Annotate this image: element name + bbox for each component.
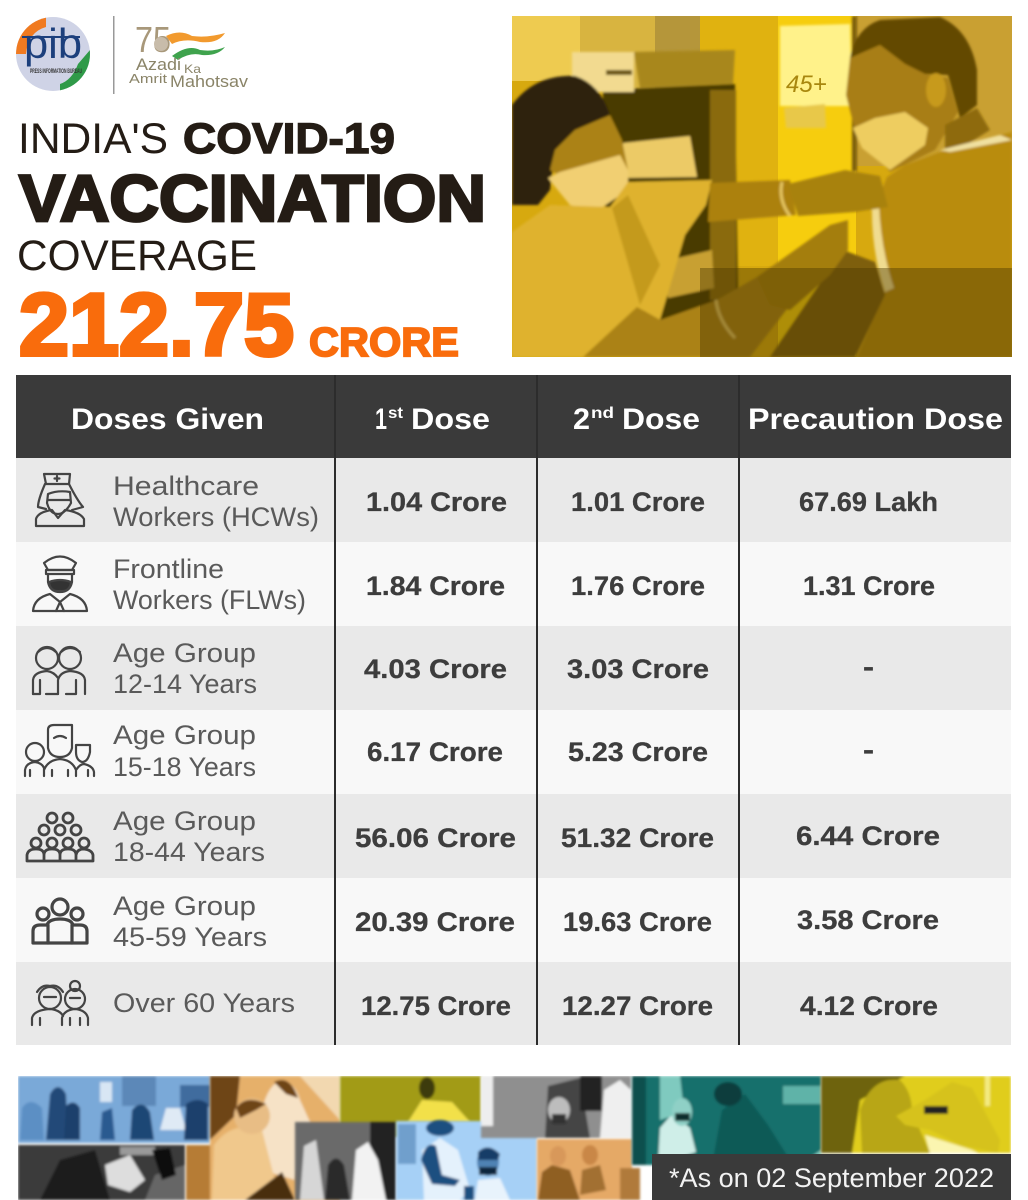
total doses figure: CRORE bbox=[309, 319, 459, 365]
photo: vaccination in progress bbox=[512, 16, 1012, 357]
logo: Azadi Ka Amrit Mahotsav: Azadi bbox=[136, 55, 181, 74]
table header: nd bbox=[591, 405, 614, 422]
collage: dark tile bbox=[18, 1145, 185, 1200]
row: healthcare workers bbox=[36, 471, 938, 532]
row: over 60: 12.75 Crore bbox=[361, 991, 511, 1021]
row: frontline workers: Workers (FLWs) bbox=[113, 585, 306, 615]
row: frontline workers: 1.76 Crore bbox=[571, 571, 705, 601]
logo: PIB bbox=[16, 17, 90, 91]
row: age 15-18: 15-18 Years bbox=[113, 752, 256, 782]
table header: 1 bbox=[375, 403, 387, 436]
collage: orange tile bbox=[186, 1076, 340, 1200]
row: age 15-18 bbox=[25, 720, 874, 782]
table header: Dose bbox=[411, 403, 490, 436]
row: age 18-44: Age Group bbox=[113, 806, 256, 836]
row: age 45-59: Age Group bbox=[113, 891, 256, 921]
row: age 12-14: 3.03 Crore bbox=[567, 654, 709, 684]
table header bbox=[16, 375, 1011, 458]
table header: Doses Given bbox=[71, 403, 264, 436]
row: frontline workers bbox=[33, 554, 935, 615]
photo: vaccination in progress: 45+ bbox=[786, 71, 827, 98]
row: age 18-44: 51.32 Crore bbox=[561, 823, 714, 853]
table header: Dose bbox=[622, 403, 700, 436]
row: age 12-14: 4.03 Crore bbox=[364, 654, 507, 684]
logo: Azadi Ka Amrit Mahotsav: Ka bbox=[184, 62, 201, 76]
row: age 15-18: - bbox=[863, 735, 874, 765]
icon: family bbox=[25, 725, 94, 776]
row: frontline workers: 1.31 Crore bbox=[803, 571, 935, 601]
logo: Azadi Ka Amrit Mahotsav bbox=[129, 19, 249, 91]
title: INDIA'S bbox=[18, 115, 168, 163]
title bbox=[17, 115, 486, 280]
logo: Azadi Ka Amrit Mahotsav: Mahotsav bbox=[170, 72, 249, 91]
collage: grey upper tile bbox=[481, 1076, 631, 1138]
row: age 18-44: 56.06 Crore bbox=[355, 823, 516, 853]
total doses figure bbox=[19, 275, 459, 374]
row: over 60: Over 60 Years bbox=[113, 988, 295, 1018]
row: age 12-14: 12-14 Years bbox=[113, 669, 257, 699]
collage: yellow tile bbox=[821, 1076, 1011, 1153]
row: age 45-59: 45-59 Years bbox=[113, 922, 267, 952]
table header: Precaution Dose bbox=[748, 403, 1003, 436]
row: age 15-18: 5.23 Crore bbox=[568, 737, 708, 767]
row: age 45-59 bbox=[33, 891, 939, 952]
row: healthcare workers: Healthcare bbox=[113, 471, 259, 501]
table header: 2 bbox=[573, 403, 590, 436]
row: healthcare workers: 1.04 Crore bbox=[366, 487, 507, 517]
table bbox=[16, 375, 1011, 1045]
collage: orange lower tile bbox=[537, 1139, 640, 1200]
logo: Azadi Ka Amrit Mahotsav: Amrit bbox=[129, 71, 167, 86]
row: over 60: 12.27 Crore bbox=[562, 991, 713, 1021]
row: age 12-14: Age Group bbox=[113, 638, 256, 668]
row: age 18-44: 6.44 Crore bbox=[796, 821, 940, 851]
date note bbox=[652, 1154, 1011, 1200]
row: age 45-59: 20.39 Crore bbox=[355, 907, 515, 937]
collage: light blue tile bbox=[396, 1120, 537, 1200]
title: VACCINATION bbox=[19, 161, 486, 235]
row: age 18-44: 18-44 Years bbox=[113, 837, 265, 867]
icon: three people bbox=[33, 899, 87, 943]
total doses figure: 212.75 bbox=[19, 275, 294, 374]
row: healthcare workers: 67.69 Lakh bbox=[799, 487, 938, 517]
icon: elderly couple bbox=[32, 981, 88, 1025]
collage: grey lower tile bbox=[295, 1122, 396, 1200]
row: over 60: 4.12 Crore bbox=[800, 991, 938, 1021]
collage: blue tile bbox=[18, 1076, 210, 1143]
row: over 60 bbox=[32, 981, 938, 1025]
row: frontline workers: Frontline bbox=[113, 554, 224, 584]
logo: Azadi Ka Amrit Mahotsav: 75 bbox=[135, 19, 171, 60]
logo: PIB: PRESS INFORMATION BUREAU bbox=[30, 69, 82, 75]
row: age 18-44 bbox=[27, 806, 940, 867]
row: age 12-14 bbox=[33, 638, 874, 699]
row: frontline workers: 1.84 Crore bbox=[366, 571, 505, 601]
collage: olive tile bbox=[340, 1076, 481, 1137]
icon: crowd bbox=[27, 813, 93, 861]
table header: st bbox=[388, 405, 404, 422]
row: age 12-14: - bbox=[863, 652, 874, 682]
row: age 15-18: 6.17 Crore bbox=[367, 737, 503, 767]
title: COVID-19 bbox=[183, 115, 395, 163]
row: healthcare workers: 1.01 Crore bbox=[571, 487, 705, 517]
icon: nurse bbox=[36, 474, 84, 526]
title: COVERAGE bbox=[17, 232, 257, 280]
date note: *As on 02 September 2022 bbox=[669, 1163, 994, 1193]
collage: teal tile bbox=[632, 1076, 821, 1165]
logo: PIB: pib bbox=[24, 20, 82, 67]
icon: officer bbox=[33, 556, 87, 611]
icon: two children bbox=[33, 647, 85, 694]
row: healthcare workers: Workers (HCWs) bbox=[113, 502, 319, 532]
row: age 45-59: 3.58 Crore bbox=[797, 905, 939, 935]
row: age 15-18: Age Group bbox=[113, 720, 256, 750]
row: age 45-59: 19.63 Crore bbox=[563, 907, 712, 937]
photo collage bbox=[18, 1076, 1011, 1200]
